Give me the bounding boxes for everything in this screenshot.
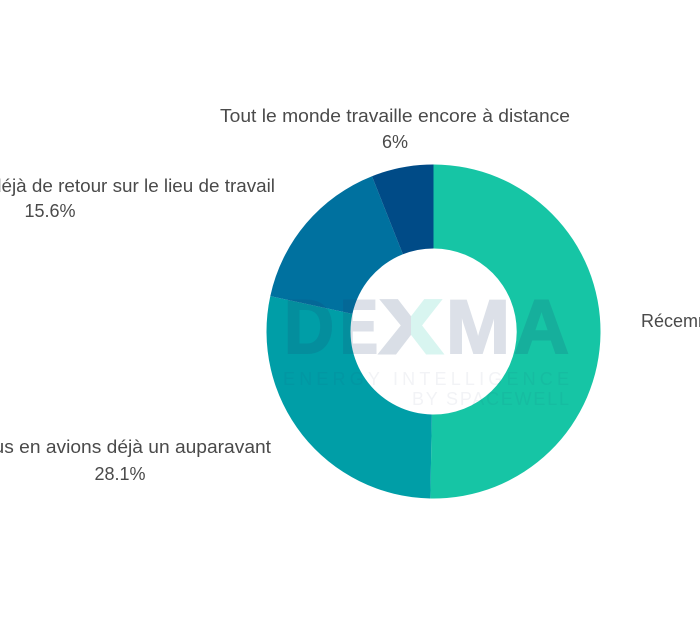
watermark: by Spacewell: BY SPACEWELL	[412, 389, 569, 409]
watermark: DEXMA logo: M	[446, 285, 510, 370]
donut chart	[267, 164, 601, 498]
watermark: DEXMA logo: D	[284, 285, 334, 370]
label: Tout le monde travaille encore à distance 6%: 6%	[382, 132, 408, 152]
watermark: DEXMA logo: E	[340, 285, 378, 370]
label: déjà de retour sur le lieu de travail 15.6%	[0, 176, 275, 221]
watermark: DEXMA logo: A	[514, 285, 569, 370]
segment: 28.1%	[267, 296, 432, 498]
segment: Récemment 50.3%	[430, 164, 601, 498]
watermark: tagline: ENERGY INTELLIGENCE	[283, 369, 569, 389]
watermark: DEXMA logo	[283, 285, 569, 409]
segment: 15.6%	[270, 176, 403, 314]
label: Tout le monde travaille encore à distance 6%	[220, 106, 570, 152]
segment: 6%	[372, 164, 434, 254]
label: déjà de retour sur le lieu de travail 15.6%: 15.6%	[24, 201, 76, 221]
label: Nous en avions déjà un auparavant 28.1%: 28.1%	[94, 464, 146, 484]
label: Tout le monde travaille encore à distance 6%: Tout le monde travaille encore à distance	[220, 106, 570, 126]
label: Nous en avions déjà un auparavant 28.1%	[0, 437, 271, 484]
watermark: DEXMA logo: X	[380, 285, 442, 370]
